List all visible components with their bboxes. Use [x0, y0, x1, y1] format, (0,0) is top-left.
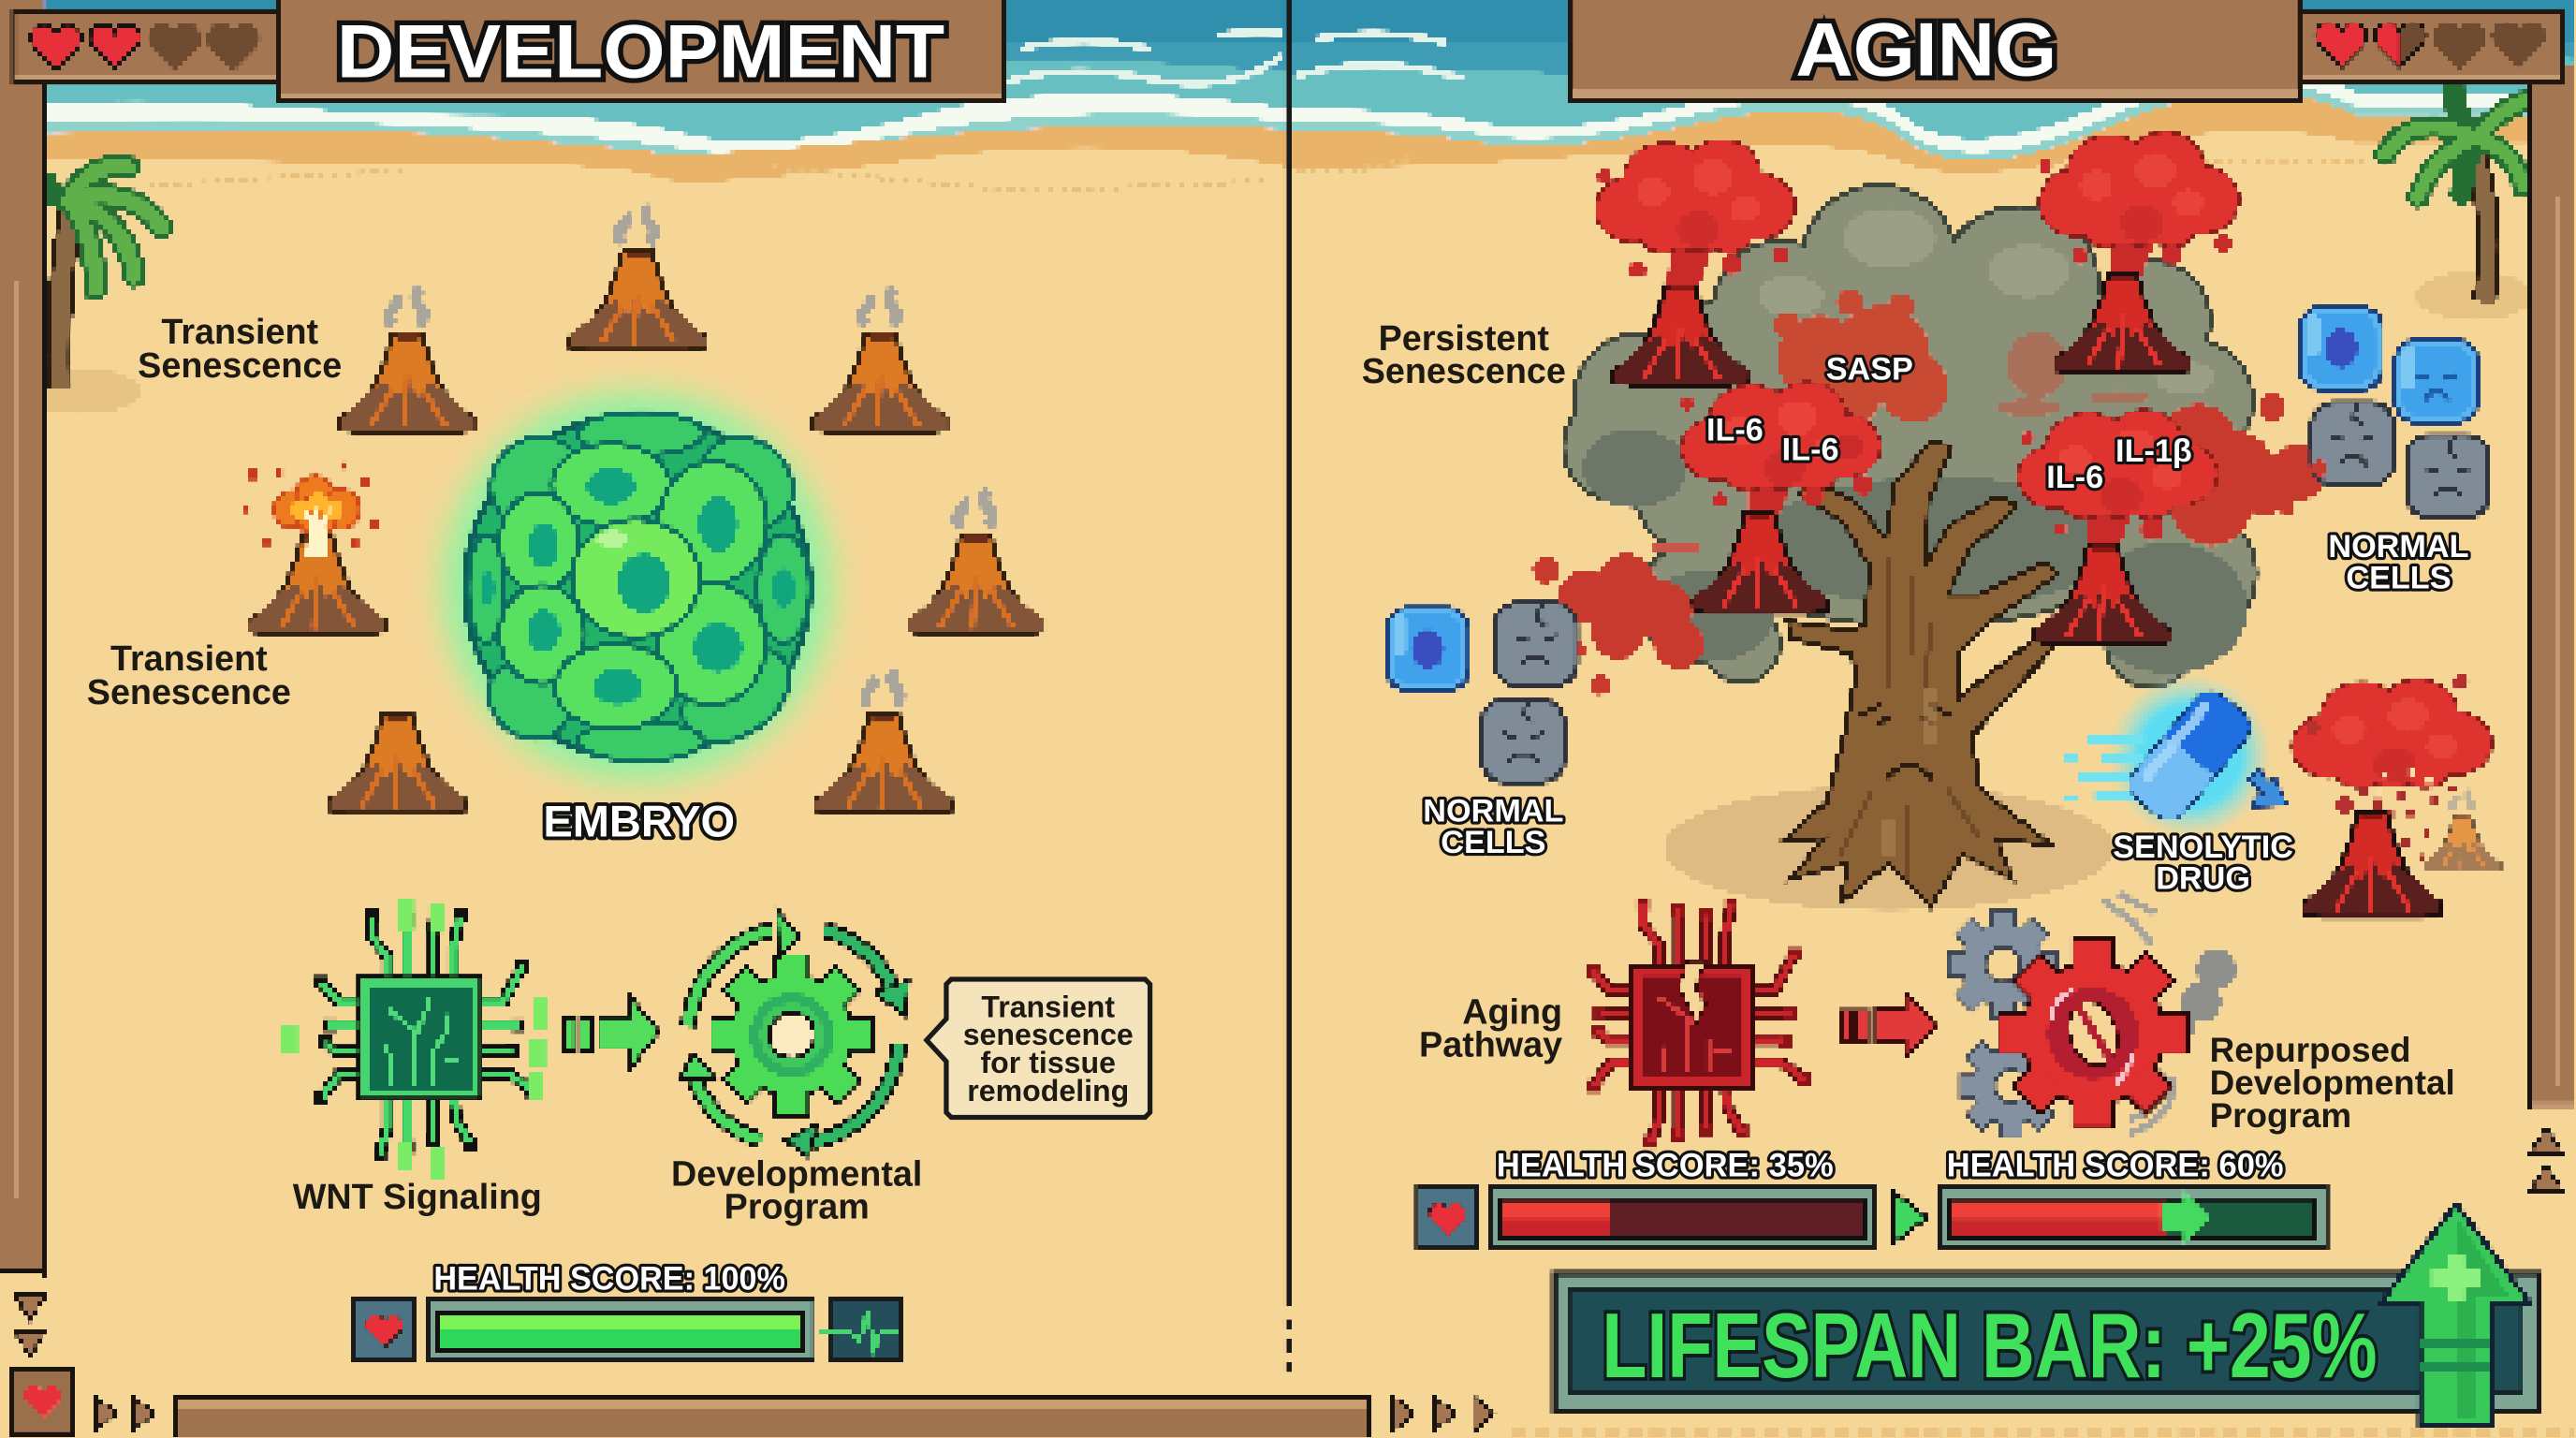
- callout text: senescence: [963, 1018, 1134, 1051]
- hearts panel background right: [2293, 10, 2561, 84]
- normal cells right: [2300, 307, 2489, 518]
- small volcano: [2425, 791, 2500, 871]
- label: normal cells left: CELLS: [1441, 825, 1545, 860]
- arrow: WNT to program: [565, 997, 659, 1068]
- callout text: remodeling: [967, 1074, 1129, 1108]
- label: senolytic drug: [2113, 829, 2293, 897]
- heart box bottom left: [13, 1371, 72, 1432]
- lifespan up arrow: [2380, 1204, 2530, 1425]
- label: aging pathway: Aging: [1462, 991, 1562, 1031]
- palm tree left: [23, 167, 161, 414]
- label: senolytic drug: SENOLYTIC: [2113, 829, 2293, 865]
- health bar: aging 60: [1940, 1188, 2326, 1247]
- palm tree right: [2385, 92, 2533, 320]
- frame left: [0, 0, 47, 1277]
- label: aging pathway: Pathway: [1419, 1025, 1562, 1064]
- title plate left: [279, 0, 1003, 102]
- label: health score 35: HEALTH SCORE: 35%: [1497, 1148, 1834, 1184]
- panel: development: [87, 9, 1150, 1360]
- chip: WNT signaling: [283, 901, 547, 1178]
- label: embryo: EMBRYO: [543, 796, 735, 845]
- sea: [0, 0, 2576, 213]
- label: SASP: SASP: [1826, 351, 1913, 387]
- label: transient senescence upper: [138, 312, 342, 385]
- title: aging: AGING: [1795, 8, 2056, 93]
- volcano right: [909, 492, 1043, 634]
- label: normal cells left: NORMAL: [1423, 794, 1563, 829]
- gear cycle arrows: [681, 910, 909, 1157]
- red gear: repurposed program: [2000, 941, 2186, 1126]
- arrow: between health bars: [1893, 1191, 1927, 1244]
- callout frame: [927, 979, 1150, 1117]
- health bar: aging 35: [1418, 1188, 1875, 1249]
- hearts left: [31, 24, 258, 69]
- label: normal cells right: [2328, 529, 2469, 595]
- plume upper right: [2039, 133, 2237, 373]
- senolytic pill: [2063, 674, 2287, 838]
- SASP spread left: [1533, 542, 1704, 695]
- title: development: DEVELOPMENT: [337, 9, 944, 94]
- normal cells left: [1386, 603, 1577, 782]
- callout text: for tissue: [980, 1046, 1116, 1079]
- label: developmental program: Developmental: [671, 1153, 922, 1193]
- hearts panel background left: [14, 10, 280, 84]
- label: lifespan bar: LIFESPAN BAR: +25%: [1602, 1294, 2378, 1397]
- center divider: [1284, 0, 1293, 1373]
- sand band bottom right: [1512, 1431, 2576, 1435]
- label: persistent senescence: Persistent: [1379, 318, 1549, 358]
- bottom plate: [174, 1399, 1370, 1438]
- plume upper left: [1597, 141, 1794, 385]
- volcano top: [570, 207, 705, 350]
- SASP haze: [1775, 289, 2149, 427]
- panel: aging: [1362, 8, 2539, 1425]
- label: IL-1 beta: IL-1β: [2115, 433, 2192, 469]
- label: WNT signaling: WNT Signaling: [293, 1177, 542, 1216]
- frame right: [2529, 66, 2576, 1110]
- label: developmental program: Program: [724, 1186, 870, 1225]
- volcano lower right: [816, 670, 951, 814]
- label: repurposed developmental program: Developmental: [2210, 1064, 2455, 1102]
- plume middle right: [2019, 394, 2333, 644]
- label: transient senescence upper: Senescence: [138, 345, 342, 385]
- lifespan bar frame: [1554, 1273, 2539, 1410]
- label: normal cells right: NORMAL: [2328, 529, 2469, 565]
- label: transient senescence lower: Senescence: [87, 672, 291, 712]
- tree foliage: [1566, 187, 2258, 685]
- callout text: Transient: [981, 990, 1115, 1023]
- tree shadow: [1664, 785, 2115, 910]
- arrow: pill to plume: [2247, 769, 2287, 807]
- chip: aging pathway: [1587, 897, 1810, 1149]
- hearts right: [2316, 22, 2543, 67]
- arrow: aging pathway to program: [1841, 992, 1936, 1058]
- label: normal cells right: CELLS: [2346, 560, 2452, 595]
- volcano lower left: [330, 714, 465, 814]
- label: transient senescence lower: [87, 638, 291, 712]
- embryo: [411, 360, 864, 814]
- callout text: [963, 990, 1134, 1108]
- volcano upper right: [813, 289, 948, 433]
- label: persistent senescence: [1362, 318, 1566, 390]
- label: transient senescence upper: Transient: [161, 312, 319, 351]
- label: IL-6 second: IL-6: [1782, 432, 1839, 467]
- label: repurposed developmental program: Repurposed: [2210, 1031, 2411, 1069]
- label: senolytic drug: DRUG: [2156, 861, 2250, 897]
- label: repurposed developmental program: [2210, 1031, 2455, 1135]
- label: normal cells left: [1423, 794, 1563, 860]
- label: developmental program: [671, 1153, 922, 1225]
- tree trunk: [1782, 440, 2056, 907]
- label: persistent senescence: Senescence: [1362, 351, 1566, 390]
- label: transient senescence lower: Transient: [110, 638, 268, 678]
- plume middle left: [1680, 383, 1880, 613]
- health bar: development: [355, 1299, 900, 1360]
- volcano upper left: [340, 289, 475, 433]
- label: IL-6 first: IL-6: [1706, 412, 1764, 448]
- title plate right: [1573, 0, 2298, 100]
- dissolving volcano: [2293, 674, 2491, 917]
- broken gray gears: [1950, 894, 2236, 1136]
- erupting volcano: [245, 462, 385, 634]
- gear: developmental program: [713, 957, 871, 1114]
- label: health score 60: HEALTH SCORE: 60%: [1947, 1148, 2284, 1184]
- label: aging pathway: [1419, 991, 1562, 1064]
- label: health score 100: HEALTH SCORE: 100%: [433, 1261, 785, 1298]
- frame triangles: [15, 1127, 2563, 1431]
- label: repurposed developmental program: Program: [2210, 1096, 2351, 1135]
- label: IL-6 third: IL-6: [2046, 460, 2103, 495]
